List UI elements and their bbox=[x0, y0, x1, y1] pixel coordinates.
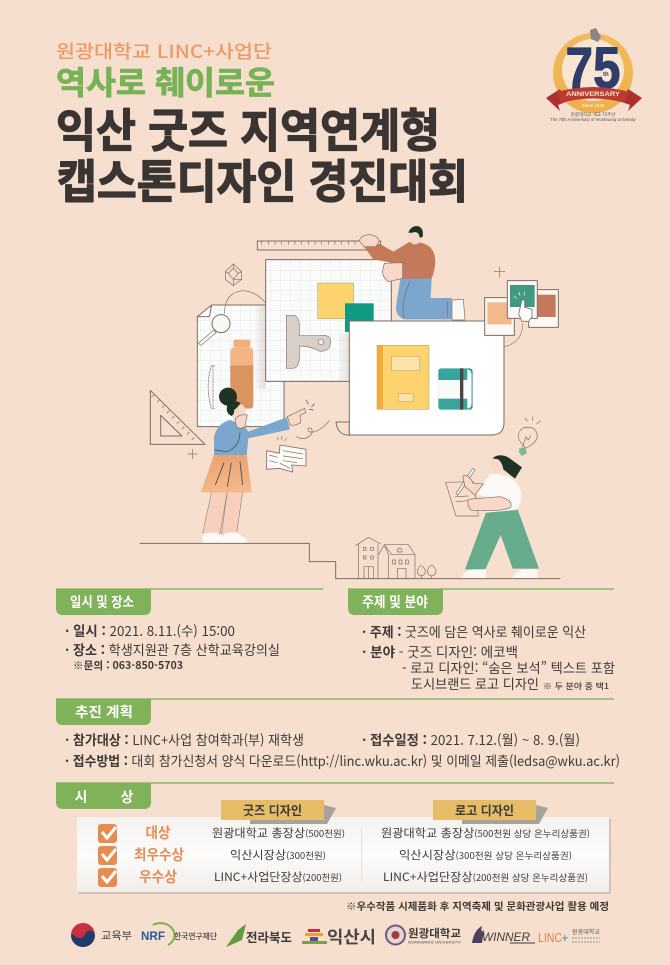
75th anniversary badge: The 75th Anniversary of Wonkwang University bbox=[550, 117, 637, 122]
curve bbox=[505, 324, 523, 347]
logo: winner and LINC+: LINC bbox=[538, 930, 562, 945]
ruler bbox=[257, 241, 381, 250]
75th anniversary badge: ANNIVERSARY bbox=[566, 91, 621, 98]
badge caption: 원광대학교 개교 75주년 bbox=[571, 111, 615, 118]
clipboard bbox=[446, 482, 478, 516]
logo: ministry of education: 교육부 bbox=[101, 928, 132, 943]
goods design prizes bbox=[212, 825, 345, 885]
squiggle bbox=[297, 421, 329, 439]
logo: jeonbuk bbox=[226, 924, 292, 947]
logo row bbox=[71, 923, 600, 948]
logo: NRF: NRF bbox=[141, 929, 165, 943]
section: date and venue: 일시 및 장소 bbox=[70, 592, 134, 612]
tab: plan bbox=[56, 699, 151, 725]
award names: 우수상 bbox=[139, 866, 177, 887]
section: theme and field bbox=[348, 588, 615, 693]
number 75: 75 bbox=[566, 36, 620, 101]
75th anniversary badge: th bbox=[603, 72, 609, 78]
logo: wonkwang university bbox=[386, 925, 461, 944]
field line 2: - 로고 디자인: “숨은 보석” 텍스트 포함 bbox=[402, 657, 615, 677]
binder clip bbox=[286, 315, 331, 368]
ribbon: logo design bbox=[433, 800, 548, 824]
hand pointing bbox=[287, 408, 306, 425]
ribbon: logo design: 로고 디자인 bbox=[455, 800, 514, 819]
title block bbox=[56, 38, 468, 212]
logo design prizes: 원광대학교 총장상 (500천원 상당 온누리상품권) bbox=[381, 825, 590, 841]
yellow square bbox=[318, 283, 354, 319]
icon: cube outline bbox=[225, 264, 242, 286]
face + hand bbox=[231, 404, 246, 422]
decorative curve bbox=[224, 291, 281, 313]
tab: awards: 상 bbox=[121, 787, 134, 807]
paper left with bottle bbox=[197, 305, 284, 427]
goods design prizes: 원광대학교 총장상 (500천원) bbox=[212, 825, 345, 841]
check icons bbox=[98, 824, 117, 887]
logo: winner and LINC+: + bbox=[561, 930, 569, 945]
pointing woman bbox=[201, 388, 314, 543]
spark lines bbox=[306, 400, 314, 410]
photo cards with cursor bbox=[485, 267, 558, 347]
foot bbox=[452, 299, 465, 320]
head bbox=[408, 229, 422, 244]
award names: 최우수상 bbox=[134, 844, 184, 865]
sparkle bbox=[494, 267, 505, 277]
shirt bbox=[475, 474, 521, 513]
illustration: design team bbox=[140, 226, 560, 579]
green subtitle: 역사로 췌이로운 bbox=[56, 58, 275, 104]
sparkle left bbox=[188, 449, 197, 459]
icon: light bulb bbox=[518, 417, 541, 456]
paper with grid and clip bbox=[266, 260, 391, 381]
inquiry line: ※문의 : 063-850-5703 bbox=[73, 658, 183, 673]
lower hand bbox=[383, 263, 403, 282]
ribbon: goods design bbox=[221, 800, 336, 824]
hair bbox=[219, 388, 237, 406]
tab: date and venue bbox=[56, 589, 151, 615]
awards card bbox=[77, 817, 611, 894]
sweater bbox=[364, 242, 435, 279]
ground steps bbox=[140, 543, 560, 579]
section: plan bbox=[56, 698, 620, 770]
main title line 1: 익산 굿즈 지역연계형 bbox=[56, 95, 440, 161]
face bbox=[491, 457, 504, 473]
logo: winner and LINC+ bbox=[472, 926, 600, 945]
tab: awards bbox=[56, 783, 151, 809]
top bbox=[214, 417, 290, 455]
date line: · 일시 : 2021. 8.11.(수) 15:00 bbox=[65, 620, 235, 640]
icon: magnifier bbox=[198, 315, 230, 345]
tab: awards: 시 bbox=[75, 787, 87, 807]
section: plan: 추진 계획 bbox=[75, 702, 133, 722]
section: awards bbox=[56, 782, 614, 913]
ribbon bbox=[546, 89, 566, 111]
ribbon: goods design: 굿즈 디자인 bbox=[243, 800, 302, 819]
writing woman bbox=[446, 417, 541, 579]
logo design prizes: LINC+사업단장상 (200천원 상당 온누리상품권) bbox=[383, 869, 588, 885]
pants bbox=[465, 507, 539, 569]
main title line 2: 캡스톤디자인 경진대회 bbox=[57, 146, 468, 212]
teal notebook bbox=[438, 368, 473, 410]
icon: pointer hand bbox=[519, 300, 532, 321]
logo: ministry of education bbox=[71, 923, 132, 947]
participants line: · 참가대상 : LINC+사업 참여학과(부) 재학생 bbox=[65, 729, 304, 749]
logo design prizes: 익산시장상 (300천원 상당 온누리상품권) bbox=[399, 847, 572, 863]
hand on ruler bbox=[359, 235, 379, 247]
shoes bbox=[202, 532, 228, 543]
hand pencil bbox=[456, 468, 475, 495]
75th anniversary badge bbox=[546, 28, 642, 122]
icon: hand bell bbox=[590, 28, 601, 42]
logo: winner and LINC+: WINNER bbox=[482, 930, 530, 944]
arm bbox=[468, 497, 511, 511]
houses and trees bbox=[356, 537, 436, 579]
organizer line: 원광대학교 LINC+사업단 bbox=[56, 38, 272, 64]
hair bbox=[493, 455, 522, 479]
award names bbox=[134, 822, 184, 887]
tab: theme and field bbox=[348, 589, 443, 615]
logo: NRF: 한국연구재단 bbox=[174, 931, 218, 942]
shoes bbox=[461, 569, 486, 579]
footnote: ※우수작품 시제품화 후 지역축제 및 문화관광사업 활용 예정 bbox=[346, 898, 609, 913]
logo: iksan city bbox=[302, 923, 376, 948]
logo: winner and LINC+: 원광대학교 bbox=[572, 927, 600, 936]
jeans bbox=[396, 278, 452, 319]
goods design prizes: LINC+사업단장상 (200천원) bbox=[214, 869, 342, 885]
logo: NRF bbox=[141, 923, 218, 945]
section: date and venue bbox=[56, 588, 323, 673]
75th anniversary badge: Since 1946 bbox=[582, 103, 605, 108]
set square bbox=[150, 390, 205, 444]
logo: wonkwang university: 원광대학교 bbox=[408, 925, 461, 941]
field line 3: 도시브랜드 로고 디자인 bbox=[411, 673, 539, 693]
logo design prizes bbox=[381, 825, 590, 885]
method line: · 접수방법 : 대회 참가신청서 양식 다운로드(http://linc.wku.ac.kr) 및 이메일 제출(ledsa@wku.ac.kr) bbox=[65, 750, 620, 770]
yellow notebook bbox=[377, 345, 429, 409]
kneeling man with ruler bbox=[359, 226, 465, 320]
skirt bbox=[201, 455, 252, 492]
field line 1: · 분야 - 굿즈 디자인: 에코백 bbox=[362, 641, 518, 661]
white note paper with notebooks bbox=[336, 321, 504, 435]
field note: ※ 두 분야 중 택1 bbox=[543, 681, 609, 692]
logo: iksan city: 익산시 bbox=[327, 923, 376, 948]
logo: jeonbuk: 전라북도 bbox=[246, 927, 292, 946]
bracket bbox=[208, 366, 215, 408]
award names: 대상 bbox=[146, 822, 170, 843]
theme line: · 주제 : 굿즈에 담은 역사로 췌이로운 익산 bbox=[362, 621, 586, 641]
teal square bbox=[345, 303, 374, 332]
logo: wonkwang university: WONKWANG UNIVERSITY bbox=[408, 940, 461, 944]
schedule line: · 접수일정 : 2021. 7.12.(월) ~ 8. 9.(월) bbox=[362, 729, 580, 749]
goods design prizes: 익산시장상 (300천원) bbox=[230, 847, 326, 863]
open book bbox=[267, 436, 306, 472]
bottle bbox=[230, 340, 253, 409]
section: theme and field: 주제 및 분야 bbox=[362, 592, 428, 612]
venue line: · 장소 : 학생지원관 7층 산학교육강의실 bbox=[65, 639, 280, 659]
legs bbox=[203, 492, 227, 533]
